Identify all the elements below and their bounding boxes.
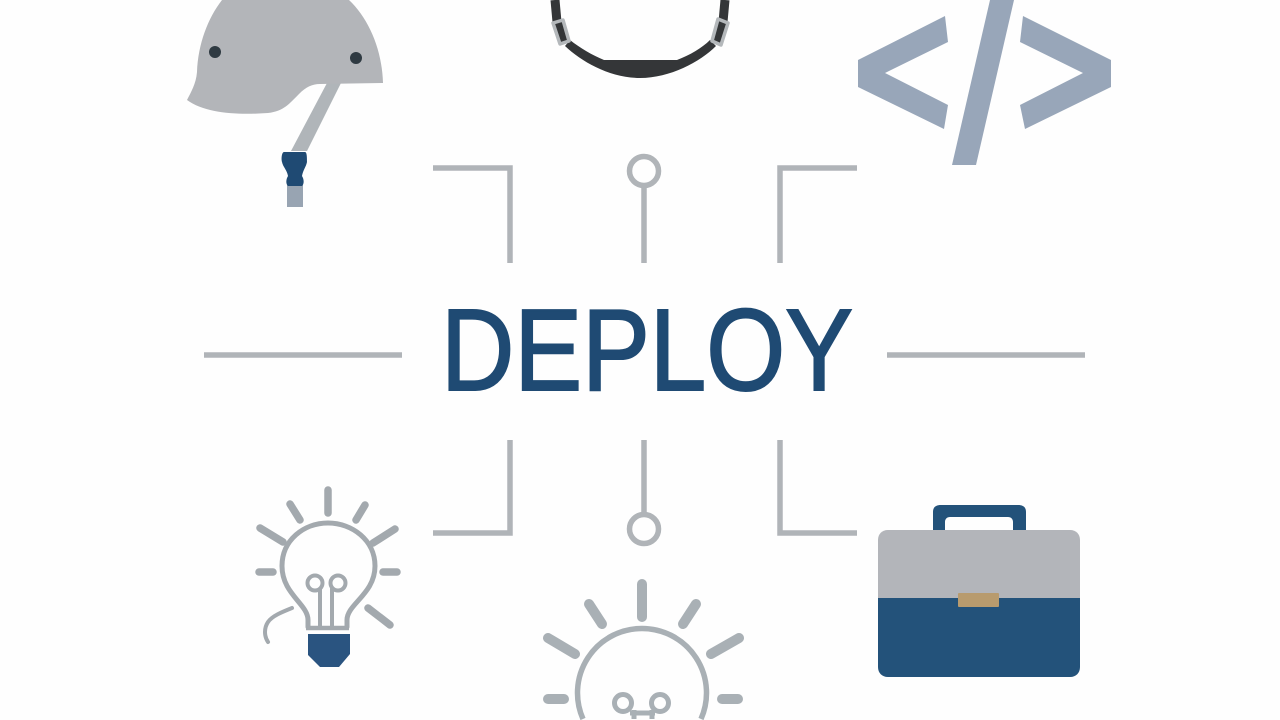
- title: DEPLOY: [441, 285, 853, 415]
- connector: top centre node: [630, 156, 658, 263]
- connector: bottom centre node: [630, 440, 658, 544]
- icon: helmet: [187, 0, 383, 207]
- connector: right line: [887, 352, 1085, 358]
- icon: code brackets: [858, 0, 1111, 165]
- connector: top left corner: [433, 168, 510, 263]
- icon: briefcase: [878, 505, 1080, 677]
- connector: bottom left corner: [433, 440, 510, 533]
- icon: chin strap: [553, 0, 728, 78]
- icon: small light bulb: [259, 490, 397, 667]
- connector: top right corner: [780, 168, 857, 263]
- icon: large light bulb: [548, 584, 739, 719]
- connector: bottom right corner: [780, 440, 857, 533]
- connector: left line: [204, 352, 402, 358]
